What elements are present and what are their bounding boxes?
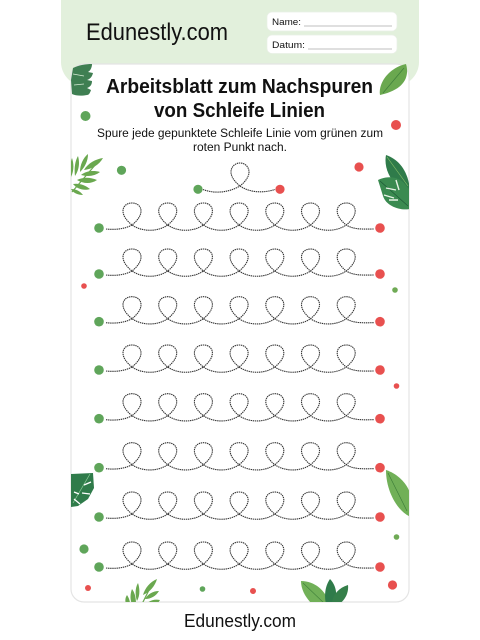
- trace row 6: [94, 443, 385, 473]
- trace row 7: [94, 492, 385, 522]
- header band: [61, 0, 419, 86]
- title: Arbeitsblatt zum Nachspuren: [106, 76, 373, 98]
- trace row 5: [94, 394, 385, 424]
- worksheet card: [71, 64, 409, 602]
- date field: [267, 35, 397, 54]
- trace row 8: [94, 542, 385, 572]
- footer brand: Edunestly.com: [184, 611, 296, 631]
- worksheet page: [61, 0, 419, 631]
- icon: leaves bottom right: [301, 579, 348, 602]
- icon: monstera leaf bottom left: [71, 473, 94, 507]
- icon: monstera leaf top left: [71, 64, 93, 96]
- icon: banana leaf top right: [380, 64, 407, 95]
- instructions: Spure jede gepunktete Schleife Linie vom grünen zum: [97, 128, 383, 140]
- name field: [267, 12, 397, 31]
- name field: Name:: [272, 17, 301, 28]
- top short loop trace: [193, 163, 285, 194]
- icon: banana leaf bottom right: [386, 470, 411, 517]
- title: [106, 76, 373, 122]
- trace row 4: [94, 345, 385, 375]
- icon: fern left: [70, 154, 103, 195]
- decorative dots: [79, 111, 401, 594]
- icon: leaves top right: [378, 155, 410, 209]
- instructions: roten Punkt nach.: [193, 142, 287, 154]
- trace row 1: [94, 203, 385, 233]
- title: von Schleife Linien: [154, 100, 325, 122]
- trace row 2: [94, 249, 385, 279]
- instructions: [97, 128, 383, 154]
- brand name: Edunestly.com: [86, 19, 228, 46]
- icon: fern bottom: [125, 579, 160, 604]
- trace row 3: [94, 297, 385, 327]
- date field: Datum:: [272, 40, 305, 51]
